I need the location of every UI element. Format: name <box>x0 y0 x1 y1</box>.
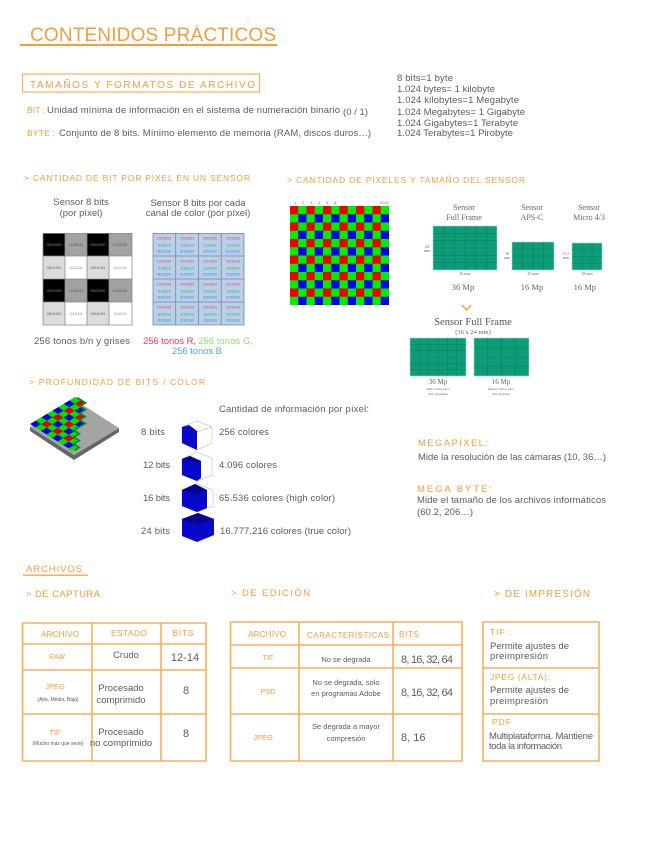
grid: RGB channel bits: 10010010 <box>157 282 171 286</box>
grid: grayscale bits: 00011001 <box>47 266 62 270</box>
byte conversion list <box>397 73 525 139</box>
panel: sensor full frame comparison: Menos celdas pero <box>488 387 514 391</box>
title: CONTENIDOS PRÁCTICOS <box>30 25 276 46</box>
sensor: full frame: Full Frame <box>446 213 482 222</box>
panel: sensor full frame comparison: Más celdas pero <box>427 387 450 391</box>
row: 12 bits <box>143 452 277 481</box>
item: JPEG alta <box>490 672 569 707</box>
table: archivos de edición: No se degrada, solo <box>312 678 380 687</box>
illustration: isometric bayer sensor <box>30 396 120 460</box>
row: 8 bits: 256 colores <box>219 427 269 438</box>
caption: RGB tones: 256 tonos G, <box>198 336 253 347</box>
table: archivos de edición: TIF <box>262 653 274 662</box>
definition: bit: BIT : <box>27 105 45 115</box>
grid: RGB channel bits: 11100110 <box>180 312 194 316</box>
sensor: APS-C: 16 <box>505 251 509 256</box>
table: archivos de captura: BITS <box>172 628 194 638</box>
item: PDF: Multiplataforma. Mantiene <box>489 731 593 742</box>
grid: RGB channel bits: 10010010 <box>157 306 171 310</box>
grid: RGB channel bits: 11100110 <box>203 290 217 294</box>
grid: grayscale bits: 11100110 <box>113 243 127 247</box>
label: sensor 8 bits: Sensor 8 bits <box>53 197 109 208</box>
grid: RGB channel bits: 01101100 <box>226 318 240 322</box>
grid: grayscale bits: 11111111 <box>113 266 127 270</box>
table: archivos de edición: compresión <box>327 734 365 743</box>
sensor: full frame <box>424 203 497 292</box>
grid: grayscale bits: 00000000 <box>90 243 106 247</box>
grid: RGB channel bits: 10010010 <box>226 282 240 286</box>
grid: RGB channel bits: 10010010 <box>226 306 240 310</box>
sensor: micro 4/3: mm <box>563 255 570 260</box>
sensor: APS-C: Sensor <box>521 203 543 212</box>
sensor: full frame: 36 mm <box>459 271 471 276</box>
sensor: APS-C: 25 mm <box>527 271 539 276</box>
sensor: micro 4/3 <box>562 203 605 292</box>
grid: RGB channel bits: 10010010 <box>226 260 240 264</box>
definition: megapíxel <box>418 438 606 463</box>
grid: RGB channel bits: 10010010 <box>203 236 217 240</box>
heading: cantidad de bit por pixel: > CANTIDAD DE BIT POR PIXEL EN UN SENSOR <box>24 173 250 183</box>
item: TIF: TIF : <box>490 627 511 637</box>
table: archivos de edición: Se degrada a mayor <box>312 722 380 731</box>
grid: RGB channel bits: 01101100 <box>180 296 194 300</box>
table: archivos de edición: en programas Adobe <box>311 689 381 698</box>
arrow: chevron down <box>462 305 471 310</box>
grid: RGB channel bits: 11100110 <box>226 290 240 294</box>
panel: archivos de impresión <box>483 622 599 761</box>
definition: bit: (0 / 1) <box>343 107 368 118</box>
heading: archivos: ARCHIVOS <box>26 564 82 575</box>
table: archivos de captura: comprimido <box>96 695 146 706</box>
table: archivos de edición: 8, 16, 32, 64 <box>401 654 453 666</box>
sensor: full frame: 36 Mp <box>452 282 474 292</box>
table: archivos de captura: Procesado <box>98 683 144 694</box>
chart: bayer pixel mosaic: 5 <box>326 200 329 205</box>
grid: RGB channel bits: 10010010 <box>180 260 194 264</box>
row: 12 bits: 12 bits <box>143 460 170 471</box>
grid: grayscale bits: 11111111 <box>69 266 83 270</box>
grid: RGB channel bits: 01101100 <box>157 272 171 276</box>
grid: RGB channel bits: 01101100 <box>157 296 171 300</box>
grid: grayscale bits: 00011001 <box>91 266 106 270</box>
grid: RGB channel bits: 11100110 <box>203 312 217 316</box>
grid: grayscale bits: 11100110 <box>113 289 127 293</box>
row: 16 bits <box>143 484 335 512</box>
heading: profundidad de bits / color: > PROFUNDIDAD DE BITS / COLOR <box>29 377 205 387</box>
item: PDF: PDF <box>492 717 511 727</box>
label: sensor 8 bits: (por píxel) <box>60 208 102 219</box>
heading: tamaños y formatos de archivo <box>22 74 260 92</box>
sensor: APS-C: APS-C <box>521 213 543 222</box>
grid: RGB channel bits: 11100110 <box>203 244 217 248</box>
label: sensor 8 bits <box>53 197 109 219</box>
grid: RGB channel bits: 01101100 <box>203 296 217 300</box>
grid: RGB channel bits: 01101100 <box>226 272 240 276</box>
chart: bayer pixel mosaic: 1 <box>294 200 297 205</box>
panel: sensor full frame comparison <box>410 317 529 396</box>
heading: de impresión: > DE IMPRESIÓN <box>494 587 590 600</box>
chart: bayer pixel mosaic: 5200 <box>380 200 390 205</box>
chart: bayer pixel mosaic: 6 <box>334 200 337 205</box>
grid: RGB channel bits: 11100110 <box>180 244 194 248</box>
table: archivos de captura: ESTADO <box>111 628 147 638</box>
panel: sensor full frame comparison: 16 Mp <box>492 378 511 386</box>
byte conversion list: 1.024 kilobytes=1 Megabyte <box>397 95 519 106</box>
grid: RGB channel bits: 11100110 <box>226 244 240 248</box>
grid: RGB channel bits: 01101100 <box>226 250 240 254</box>
row: 8 bits: 8 bits <box>141 427 165 438</box>
table: archivos de captura: no comprimido <box>90 738 152 749</box>
sensor: micro 4/3: Micro 4/3 <box>573 213 605 222</box>
grid: RGB channel bits: 10010010 <box>226 236 240 240</box>
caption: RGB tones: 256 tonos B <box>172 346 222 357</box>
grid: RGB channel bits: 10010010 <box>203 260 217 264</box>
grid: RGB channel bits: 11100110 <box>157 244 171 248</box>
definition: mega byte <box>417 484 606 518</box>
item: PDF <box>489 717 593 752</box>
byte conversion list: 1.024 Gigabytes=1 Terabyte <box>397 118 518 129</box>
table: archivos de captura: Procesado <box>98 727 144 738</box>
table: archivos de captura: 12-14 <box>171 652 199 664</box>
heading: de captura: > DE CAPTURA <box>26 589 101 600</box>
definition: megapíxel: Mide la resolución de las cámaras (10, 36…) <box>418 452 606 463</box>
sensor: full frame: Sensor <box>453 203 475 212</box>
grid: RGB channel bits: 11100110 <box>226 266 240 270</box>
byte conversion list: 1.024 bytes= 1 kilobyte <box>397 84 495 95</box>
grid: RGB channel bits: 01101100 <box>203 272 217 276</box>
chart: bayer pixel mosaic: 2 <box>302 200 305 205</box>
sensor: micro 4/3: 13.5 <box>562 251 570 256</box>
table: archivos de captura <box>22 623 206 761</box>
table: archivos de captura: (Mucho más que serie) <box>32 741 84 747</box>
sensor: APS-C: 16 Mp <box>521 282 543 292</box>
grid: RGB channel bits: 01101100 <box>226 296 240 300</box>
grid: grayscale bits: 11100110 <box>69 243 83 247</box>
grid: RGB channel bits: 10010010 <box>157 236 171 240</box>
definition: mega byte: (60.2, 206…) <box>417 507 473 518</box>
table: archivos de edición: JPEG <box>253 733 273 742</box>
label: sensor 8 bits por canal: Sensor 8 bits por cada <box>150 198 246 209</box>
sensor: micro 4/3: 18 mm <box>581 271 593 276</box>
byte conversion list: 1.024 Terabytes=1 Pirobyte <box>397 128 513 139</box>
grid: grayscale bits: 00000000 <box>90 289 106 293</box>
label: sensor 8 bits por canal: canal de color (por píxel) <box>146 208 250 219</box>
item: JPEG alta: preimpresión <box>490 696 548 707</box>
grid: RGB channel bits: 11100110 <box>203 266 217 270</box>
grid: RGB channel bits: 10010010 <box>180 236 194 240</box>
item: TIF <box>490 627 569 662</box>
grid: RGB channel bits: 01101100 <box>180 318 194 322</box>
panel: sensor full frame comparison: Sensor Full Frame <box>434 317 512 328</box>
table: archivos de captura: 8 <box>183 685 189 697</box>
definition: mega byte: MEGA BYTE: <box>417 484 492 495</box>
definition: mega byte: Mide el tamaño de los archivos informáticos <box>417 495 606 506</box>
definition: byte: Conjunto de 8 bits. Mínimo elemento de memoria (RAM, discos duros…) <box>59 128 371 139</box>
grid: grayscale bits: 11111111 <box>69 312 83 316</box>
sensor: full frame: mm <box>424 248 431 253</box>
row: 16 bits: 65.536 colores (high color) <box>219 493 335 504</box>
table: archivos de captura: 8 <box>183 728 189 740</box>
row: 12 bits: 4.096 colores <box>219 460 277 471</box>
row: 24 bits <box>141 513 351 542</box>
grid: RGB channel bits: 11100110 <box>157 290 171 294</box>
table: archivos de edición: 8, 16 <box>401 732 425 744</box>
byte conversion list: 8 bits=1 byte <box>397 73 453 84</box>
caption: RGB tones: 256 tonos R, <box>143 336 196 347</box>
grid: RGB channel bits: 10010010 <box>180 282 194 286</box>
grid: RGB channel bits: 01101100 <box>157 250 171 254</box>
grid: grayscale bits <box>43 233 132 325</box>
table: archivos de captura: Crudo <box>113 650 139 661</box>
item: TIF: preimpresión <box>490 651 548 662</box>
grid: RGB channel bits: 11100110 <box>157 312 171 316</box>
grid: RGB channel bits: 01101100 <box>180 272 194 276</box>
row: 24 bits: 16.777.216 colores (true color) <box>220 526 351 537</box>
grid: RGB channel bits <box>153 233 244 325</box>
table: archivos de edición: ARCHIVO <box>248 630 286 639</box>
grid: RGB channel bits: 11100110 <box>226 312 240 316</box>
chart: bayer pixel mosaic <box>290 200 390 305</box>
grid: RGB channel bits: 01101100 <box>157 318 171 322</box>
grid: grayscale bits: 11100110 <box>69 289 83 293</box>
table: archivos de captura: JPEG <box>45 682 65 691</box>
table: archivos de edición: CARACTERÍSTICAS <box>307 631 389 640</box>
grid: RGB channel bits: 10010010 <box>203 282 217 286</box>
row: 24 bits: 24 bits <box>141 526 170 537</box>
item: JPEG alta: Permite ajustes de <box>490 685 569 696</box>
grid: RGB channel bits: 10010010 <box>157 260 171 264</box>
table: archivos de edición <box>230 622 462 761</box>
table: archivos de captura: (Alta, Media, Baja) <box>37 697 79 703</box>
grid: RGB channel bits: 01101100 <box>180 250 194 254</box>
item: TIF: Permite ajustes de <box>490 641 569 652</box>
grid: RGB channel bits: 11100110 <box>157 266 171 270</box>
sensor: micro 4/3: 16 Mp <box>574 282 596 292</box>
caption: RGB tones <box>143 336 253 357</box>
label: sensor 8 bits por canal <box>146 198 250 219</box>
definition: bit: Unidad mínima de información en el sistema de numeración binario <box>47 105 340 116</box>
panel: sensor full frame comparison: (36 x 24 mm) <box>455 329 491 336</box>
panel: sensor full frame comparison: más pequeñas <box>428 392 448 396</box>
grid: grayscale bits: 00000000 <box>46 289 62 293</box>
byte conversion list: 1.024 Megabytes= 1 Gigabyte <box>397 107 525 118</box>
item: PDF: toda la información <box>489 741 562 752</box>
sensor: full frame: 24 <box>425 244 429 249</box>
grid: RGB channel bits: 11100110 <box>180 266 194 270</box>
grid: grayscale bits: 00000000 <box>46 243 62 247</box>
grid: RGB channel bits: 10010010 <box>180 306 194 310</box>
table: archivos de edición: No se degrada <box>321 655 371 664</box>
sensor: micro 4/3: Sensor <box>578 203 600 212</box>
item: JPEG alta: JPEG (ALTA): <box>490 672 550 682</box>
table: archivos de captura: RAW <box>49 654 65 661</box>
grid: RGB channel bits: 01101100 <box>203 250 217 254</box>
grid: grayscale bits: 00011001 <box>91 312 106 316</box>
row: 8 bits <box>141 421 269 450</box>
grid: RGB channel bits: 01101100 <box>203 318 217 322</box>
caption: grayscale tones: 256 tonos b/n y grises <box>34 336 130 347</box>
grid: RGB channel bits: 10010010 <box>203 306 217 310</box>
table: archivos de edición: PSD <box>260 687 276 696</box>
label: cantidad de información: Cantidad de información por píxel: <box>219 404 369 415</box>
sensor: APS-C: mm <box>504 255 511 260</box>
heading: de edición: > DE EDICIÓN <box>231 588 310 599</box>
grid: RGB channel bits: 11100110 <box>180 290 194 294</box>
grid: grayscale bits: 11111111 <box>113 312 127 316</box>
table: archivos de captura: TIF <box>49 728 61 737</box>
table: archivos de captura: ARCHIVO <box>41 630 79 639</box>
chart: bayer pixel mosaic: 4 <box>318 200 321 205</box>
definition: megapíxel: MEGAPÍXEL: <box>418 438 488 449</box>
heading: cantidad de píxeles y tamaño del sensor: > CANTIDAD DE PÍXELES Y TAMAÑO DEL SENSOR <box>287 175 525 185</box>
heading: tamaños y formatos de archivo: TAMAÑOS Y FORMATOS DE ARCHIVO <box>30 78 255 91</box>
grid: grayscale bits: 00011001 <box>47 312 62 316</box>
sensor: APS-C <box>504 203 554 292</box>
panel: sensor full frame comparison: 36 Mp <box>429 378 448 386</box>
table: archivos de edición: BITS <box>399 630 419 639</box>
table: archivos de edición: 8, 16, 32, 64 <box>401 687 453 699</box>
row: 16 bits: 16 bits <box>143 493 170 504</box>
definition: byte: BYTE : <box>27 128 55 138</box>
chart: bayer pixel mosaic: 3 <box>310 200 313 205</box>
panel: sensor full frame comparison: más grandes <box>492 392 510 396</box>
